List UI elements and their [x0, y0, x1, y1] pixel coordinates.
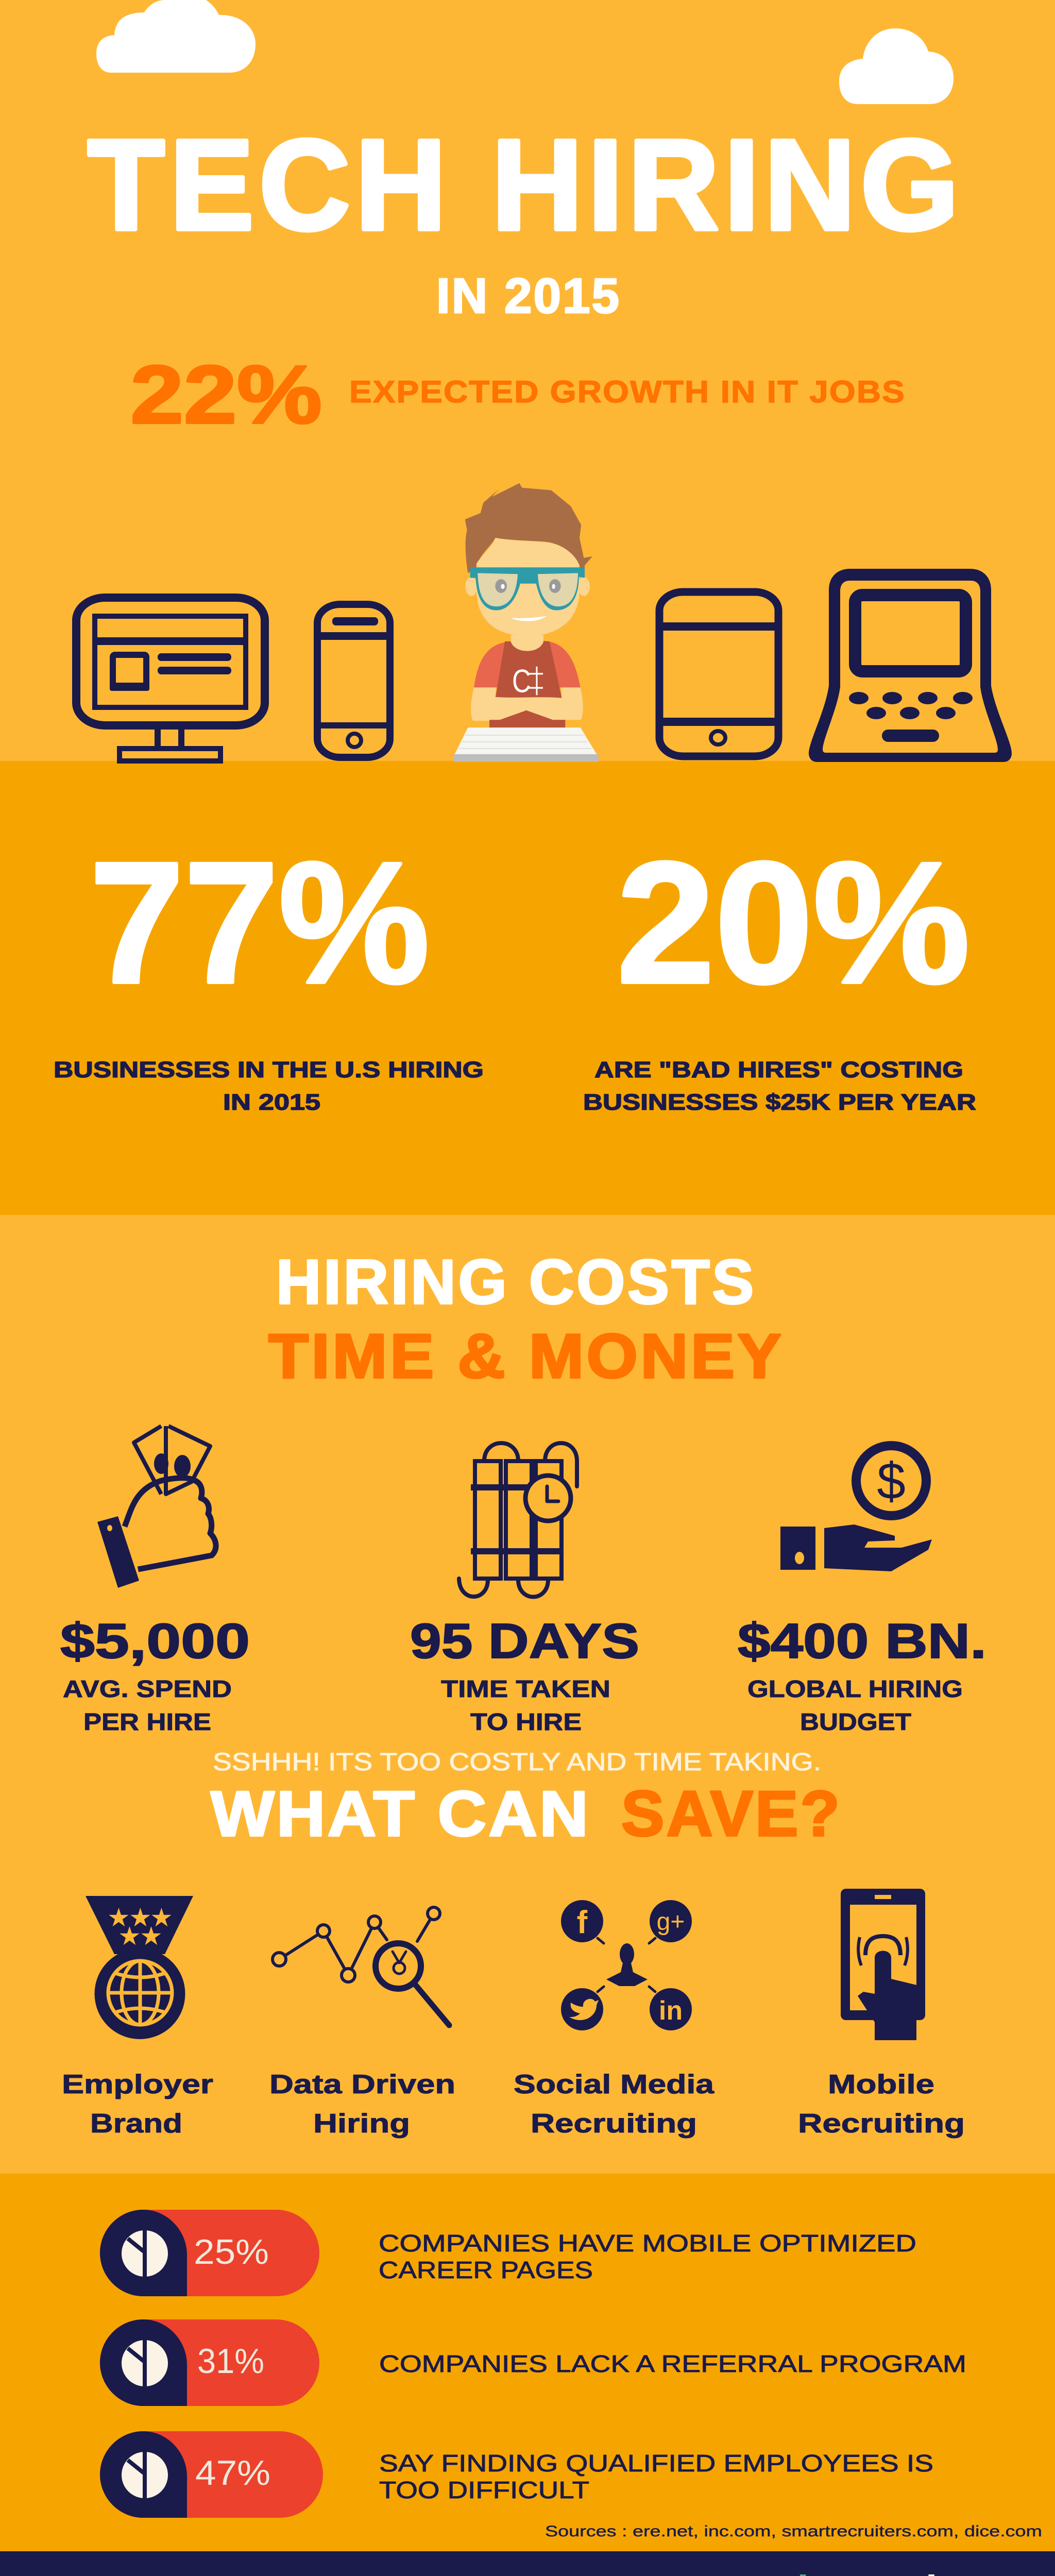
- pill stat: 47 percent: 47%: [195, 2453, 270, 2493]
- icon: employer brand medal: ★★★: [107, 1903, 173, 1933]
- stat: global budget: BUDGET: [800, 1708, 911, 1735]
- icon: data driven magnifier: [273, 1907, 449, 2025]
- text: referral program: COMPANIES LACK A REFERRAL PROGRAM: [379, 2350, 966, 2377]
- label: social media recruiting: [514, 2070, 714, 2139]
- stat: spend per hire: [60, 1614, 250, 1735]
- label: employer brand: [62, 2070, 213, 2139]
- label: data driven hiring: [269, 2070, 455, 2139]
- stat: job growth: 22%: [130, 348, 322, 440]
- icon: tablet: [656, 592, 782, 756]
- label: mobile recruiting: Recruiting: [798, 2109, 965, 2139]
- icon: hand with coin: [780, 1446, 932, 1571]
- heading: what can save: SAVE?: [621, 1778, 842, 1850]
- icon: hand with coin: $: [877, 1452, 906, 1510]
- icon: dynamite clock: [459, 1443, 577, 1597]
- icon: cloud right: [839, 28, 954, 104]
- stat: 20 percent: ARE "BAD HIRES" COSTING: [594, 1057, 963, 1082]
- stat: 20 percent: 20%: [617, 826, 970, 1020]
- icon: social media network: in: [659, 1996, 683, 2026]
- pill stat: 31 percent: 31%: [197, 2342, 264, 2381]
- illustration: developer at keyboard: C: [512, 663, 531, 699]
- icon: mobile recruiting touch: [841, 1889, 925, 2040]
- stat: 20 percent: BUSINESSES $25K PER YEAR: [583, 1090, 976, 1115]
- stat: 77 percent: [54, 826, 484, 1115]
- text: tagline: SSHHH! ITS TOO COSTLY AND TIME TAKING.: [213, 1749, 821, 1776]
- icon: hand holding money: [97, 1426, 216, 1588]
- label: data driven hiring: Data Driven: [269, 2070, 455, 2099]
- text: qualified employees: SAY FINDING QUALIFIED EMPLOYEES IS: [379, 2450, 933, 2477]
- icon: social media network: g+: [657, 1908, 685, 1936]
- stat: days to hire: 95 DAYS: [410, 1614, 639, 1669]
- icon: cloud left: [96, 0, 256, 73]
- stat: spend per hire: PER HIRE: [83, 1708, 211, 1735]
- heading: time and money: TIME & MONEY: [268, 1321, 784, 1391]
- icon: employer brand medal: ★★: [118, 1921, 163, 1951]
- pill stat: 25 percent: 25%: [194, 2232, 269, 2272]
- text: qualified employees: TOO DIFFICULT: [379, 2477, 589, 2503]
- stat: 77 percent: BUSINESSES IN THE U.S HIRING: [54, 1057, 484, 1082]
- panel: footer: [0, 2551, 1055, 2576]
- text: qualified employees: [379, 2450, 933, 2503]
- stat: days to hire: [410, 1614, 639, 1735]
- stat: job growth: [130, 348, 906, 440]
- label: mobile recruiting: [798, 2070, 965, 2139]
- label: data driven hiring: Hiring: [313, 2109, 410, 2139]
- stat: global budget: GLOBAL HIRING: [747, 1675, 963, 1702]
- logo: doselect: [773, 2563, 1028, 2576]
- stat: spend per hire: $5,000: [60, 1614, 250, 1669]
- icon: laptop with keypad: [809, 569, 1012, 762]
- label: social media recruiting: Recruiting: [531, 2109, 697, 2139]
- icon: smartphone: [314, 604, 394, 757]
- panel: stats band: [0, 761, 1055, 1215]
- icon: social media network: f: [577, 1905, 588, 1940]
- pill stat: 25 percent: [100, 2210, 319, 2296]
- heading: what can save: WHAT CAN: [211, 1778, 590, 1850]
- text: mobile career pages: [379, 2230, 916, 2283]
- stat: 20 percent: [583, 826, 976, 1115]
- stat: days to hire: TIME TAKEN: [441, 1675, 610, 1702]
- pill stat: 47 percent: [100, 2431, 323, 2518]
- icon: desktop monitor: [76, 598, 265, 761]
- label: employer brand: Brand: [90, 2109, 182, 2139]
- subtitle: IN 2015: [436, 268, 621, 324]
- stat: global budget: [738, 1614, 986, 1735]
- stat: global budget: $400 BN.: [738, 1614, 986, 1669]
- illustration: developer at keyboard: [453, 483, 599, 762]
- stat: spend per hire: AVG. SPEND: [63, 1675, 232, 1702]
- stat: job growth: EXPECTED GROWTH IN IT JOBS: [349, 375, 906, 409]
- stat: days to hire: TO HIRE: [470, 1708, 582, 1735]
- label: social media recruiting: Social Media: [514, 2070, 714, 2099]
- icon: social media network: [561, 1900, 692, 2030]
- stat: 77 percent: 77%: [90, 826, 430, 1020]
- label: mobile recruiting: Mobile: [828, 2070, 934, 2099]
- text: mobile career pages: COMPANIES HAVE MOBILE OPTIMIZED: [379, 2230, 916, 2257]
- heading: hiring costs: HIRING COSTS: [276, 1247, 756, 1317]
- text: mobile career pages: CAREER PAGES: [379, 2257, 593, 2283]
- heading: what can save: [211, 1778, 842, 1850]
- panel: pill stats band: [0, 2174, 1055, 2551]
- icon: employer brand medal: [86, 1896, 193, 2039]
- label: employer brand: Employer: [62, 2070, 213, 2099]
- title: TECH HIRING: [88, 113, 964, 257]
- pill stat: 31 percent: [100, 2319, 319, 2406]
- text: sources: Sources : ere.net, inc.com, smartrecruiters.com, dice.com: [545, 2523, 1042, 2540]
- stat: 77 percent: IN 2015: [223, 1090, 320, 1115]
